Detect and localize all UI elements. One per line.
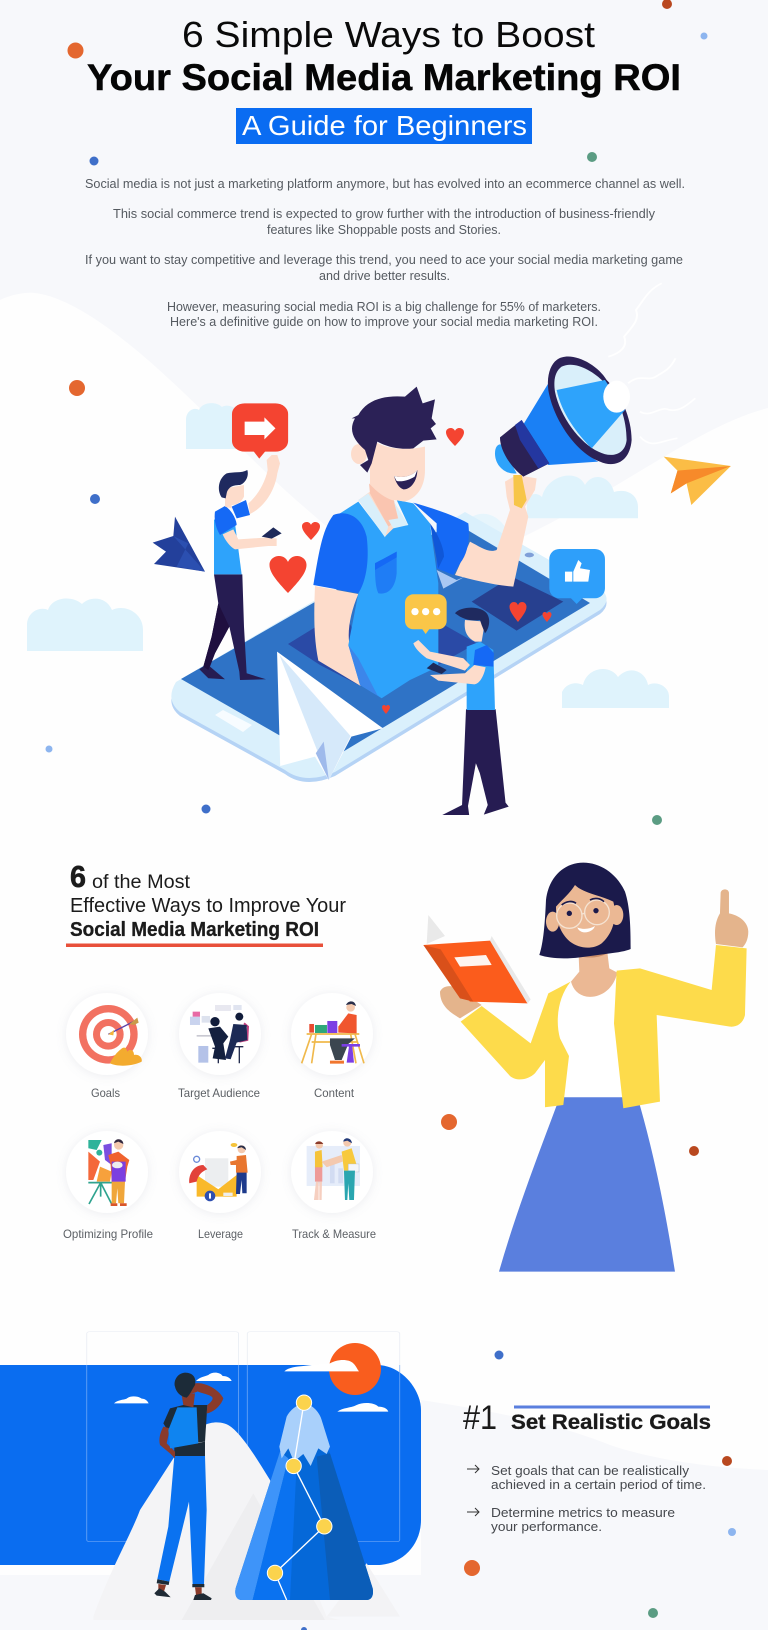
- icon: goals target: [79, 1005, 142, 1066]
- bullet two: Determine metrics to measure: [491, 1505, 675, 1520]
- glasses: [557, 900, 609, 928]
- hero illustration: [153, 357, 731, 815]
- labels: Leverage: [198, 1227, 243, 1241]
- labels: Track & Measure: [292, 1227, 376, 1241]
- megaphone: [495, 357, 632, 477]
- phone body: [171, 512, 607, 782]
- faint frames over panel: [87, 1365, 400, 1542]
- icon: optimizing profile: [88, 1139, 129, 1206]
- icon: white paper plane: [277, 652, 383, 780]
- ways grid: [63, 993, 376, 1241]
- intro text: However, measuring social media ROI is a big challenge for 55% of marketers.: [167, 300, 601, 314]
- squiggle lines: [608, 283, 695, 443]
- labels: Goals: [91, 1086, 120, 1100]
- background clouds: [186, 403, 669, 708]
- woman with book illustration: [423, 863, 748, 1272]
- section heading: Effective Ways to Improve Your: [70, 895, 346, 917]
- intro text: and drive better results.: [319, 269, 450, 283]
- labels: [63, 1086, 376, 1241]
- heading: set realistic goals: #1: [463, 1399, 497, 1437]
- top: [559, 973, 623, 1097]
- title: [87, 14, 681, 98]
- labels: Target Audience: [178, 1086, 260, 1100]
- hill: [93, 1422, 340, 1620]
- man: left sleeve: [313, 513, 368, 593]
- circle backgrounds: [66, 993, 373, 1213]
- bullet two: your performance.: [491, 1519, 602, 1534]
- hiker: [154, 1373, 223, 1600]
- clouds: [114, 1360, 388, 1412]
- icons: [79, 1001, 364, 1206]
- skirt: [499, 1097, 675, 1272]
- icon: navy paper plane: [153, 517, 205, 572]
- icon: track and measure: [307, 1138, 360, 1200]
- hair: [539, 863, 631, 958]
- left person and navy plane: [153, 455, 282, 680]
- man: head: [351, 444, 367, 464]
- sun: [329, 1343, 381, 1395]
- icon: right arrow sign: [232, 403, 288, 459]
- book: [423, 915, 531, 1004]
- icon: thumbs up sign, chat bubble and right person: [405, 549, 605, 815]
- icon: content: [302, 1001, 364, 1064]
- blue panel: [0, 1365, 421, 1565]
- cloud: far left: [27, 598, 143, 651]
- section heading: of the Most: [92, 872, 191, 893]
- cardigan: [614, 945, 747, 1108]
- heading: set realistic goals: Set Realistic Goals: [511, 1411, 711, 1434]
- intro text: If you want to stay competitive and leverage this trend, you need to ace your social media marketing game: [85, 253, 683, 267]
- hearts: [270, 428, 552, 714]
- intro text: Here's a definitive guide on how to improve your social media marketing ROI.: [170, 315, 598, 329]
- intro text: Social media is not just a marketing platform anymore, but has evolved into an ecommerce channel as well.: [85, 177, 685, 191]
- face: [556, 885, 615, 948]
- section heading: 6: [70, 859, 86, 894]
- section heading: Social Media Marketing ROI: [70, 919, 319, 941]
- hand pointing: [715, 889, 748, 947]
- title: Your Social Media Marketing ROI: [87, 57, 681, 98]
- title: 6 Simple Ways to Boost: [182, 14, 595, 55]
- decorative dots: woman: [441, 1114, 699, 1156]
- labels: Optimizing Profile: [63, 1227, 153, 1241]
- labels: Content: [314, 1086, 355, 1100]
- bullet two: [467, 1505, 675, 1534]
- heading: set realistic goals: [463, 1399, 711, 1437]
- mountain: [235, 1395, 373, 1600]
- man: left arm: [314, 586, 361, 686]
- faint frames above panel: [87, 1332, 400, 1542]
- neck: [571, 947, 617, 997]
- bullet one: [467, 1463, 706, 1492]
- icon: leverage: [189, 1143, 248, 1201]
- icon: orange paper plane: [664, 457, 731, 505]
- bullet one: achieved in a certain period of time.: [491, 1477, 706, 1492]
- screen panels and man: [288, 357, 632, 698]
- left hand: [440, 986, 482, 1018]
- bullet list: [467, 1463, 706, 1534]
- icon: target audience: [190, 1005, 248, 1063]
- decorative dots: hero: [46, 380, 662, 825]
- subtitle badge: A Guide for Beginners: [242, 110, 527, 141]
- man: right arm: [455, 475, 537, 587]
- decorative dots: header: [68, 0, 708, 166]
- section heading: [66, 859, 346, 947]
- bullet one: Set goals that can be realistically: [491, 1463, 690, 1478]
- man: right sleeve: [413, 503, 469, 575]
- intro text: features like Shoppable posts and Stories.: [267, 223, 501, 237]
- man: torso: [340, 500, 438, 698]
- intro text: This social commerce trend is expected to grow further with the introduction of business-friendly: [113, 207, 656, 221]
- intro text: [85, 177, 685, 329]
- megaphone handle: [513, 475, 527, 508]
- decorative dots: goals: [301, 1350, 736, 1630]
- goals panel illustration: [0, 1332, 421, 1620]
